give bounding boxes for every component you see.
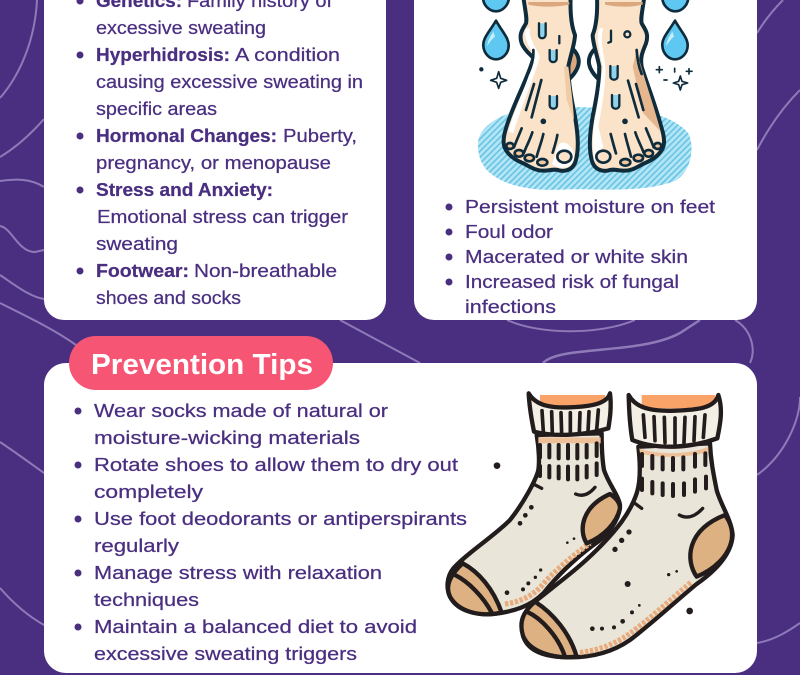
sweat on feet <box>539 23 630 123</box>
causes list: Hormonal Changes: <box>96 125 277 146</box>
causes list: Footwear: <box>96 260 189 281</box>
prevention list: regularly <box>94 535 180 556</box>
symptoms list <box>446 196 716 317</box>
causes list: Puberty, <box>283 125 357 146</box>
symptoms list: Increased risk of fungal <box>465 271 679 292</box>
right foot <box>589 0 664 171</box>
causes list: sweating <box>96 233 178 254</box>
symptoms list: Macerated or white skin <box>465 246 688 267</box>
causes list: specific areas <box>96 98 217 119</box>
panel: symptoms <box>414 0 757 320</box>
symptoms list: Foul odor <box>465 221 553 242</box>
prevention list <box>74 400 467 664</box>
prevention list: moisture-wicking materials <box>94 427 360 448</box>
prevention list: Maintain a balanced diet to avoid <box>94 616 417 637</box>
prevention list: Use foot deodorants or antiperspirants <box>94 508 467 529</box>
causes list: causing excessive sweating in <box>96 71 363 92</box>
causes list <box>76 0 363 308</box>
right sock <box>521 395 733 657</box>
left foot <box>504 0 579 171</box>
causes list: shoes and socks <box>96 287 241 308</box>
causes list: Emotional stress can trigger <box>97 206 348 227</box>
prevention list: completely <box>94 481 204 502</box>
prevention list: Rotate shoes to allow them to dry out <box>94 454 459 475</box>
prevention list: excessive sweating triggers <box>94 643 357 664</box>
causes list: Stress and Anxiety: <box>96 179 273 200</box>
heading: Prevention Tips: Prevention Tips <box>91 349 313 381</box>
left sock <box>448 393 620 614</box>
causes list: A condition <box>235 44 340 65</box>
symptoms list: infections <box>465 296 556 317</box>
prevention list: techniques <box>94 589 199 610</box>
water drops <box>483 0 688 59</box>
icon: pair of socks <box>448 393 733 657</box>
causes list: Non-breathable <box>194 260 337 281</box>
prevention list: Manage stress with relaxation <box>94 562 382 583</box>
heading: Prevention Tips <box>69 336 333 390</box>
causes list: pregnancy, or menopause <box>96 152 331 173</box>
causes list: Hyperhidrosis: <box>96 44 230 65</box>
symptoms list: Persistent moisture on feet <box>465 196 716 217</box>
sparkles <box>480 67 692 90</box>
causes list: excessive sweating <box>96 17 266 38</box>
panel: prevention tips <box>44 336 757 673</box>
panel: causes <box>44 0 386 320</box>
icon: wet feet on mat <box>478 0 692 190</box>
sock dots <box>494 462 693 631</box>
prevention list: Wear socks made of natural or <box>94 400 388 421</box>
